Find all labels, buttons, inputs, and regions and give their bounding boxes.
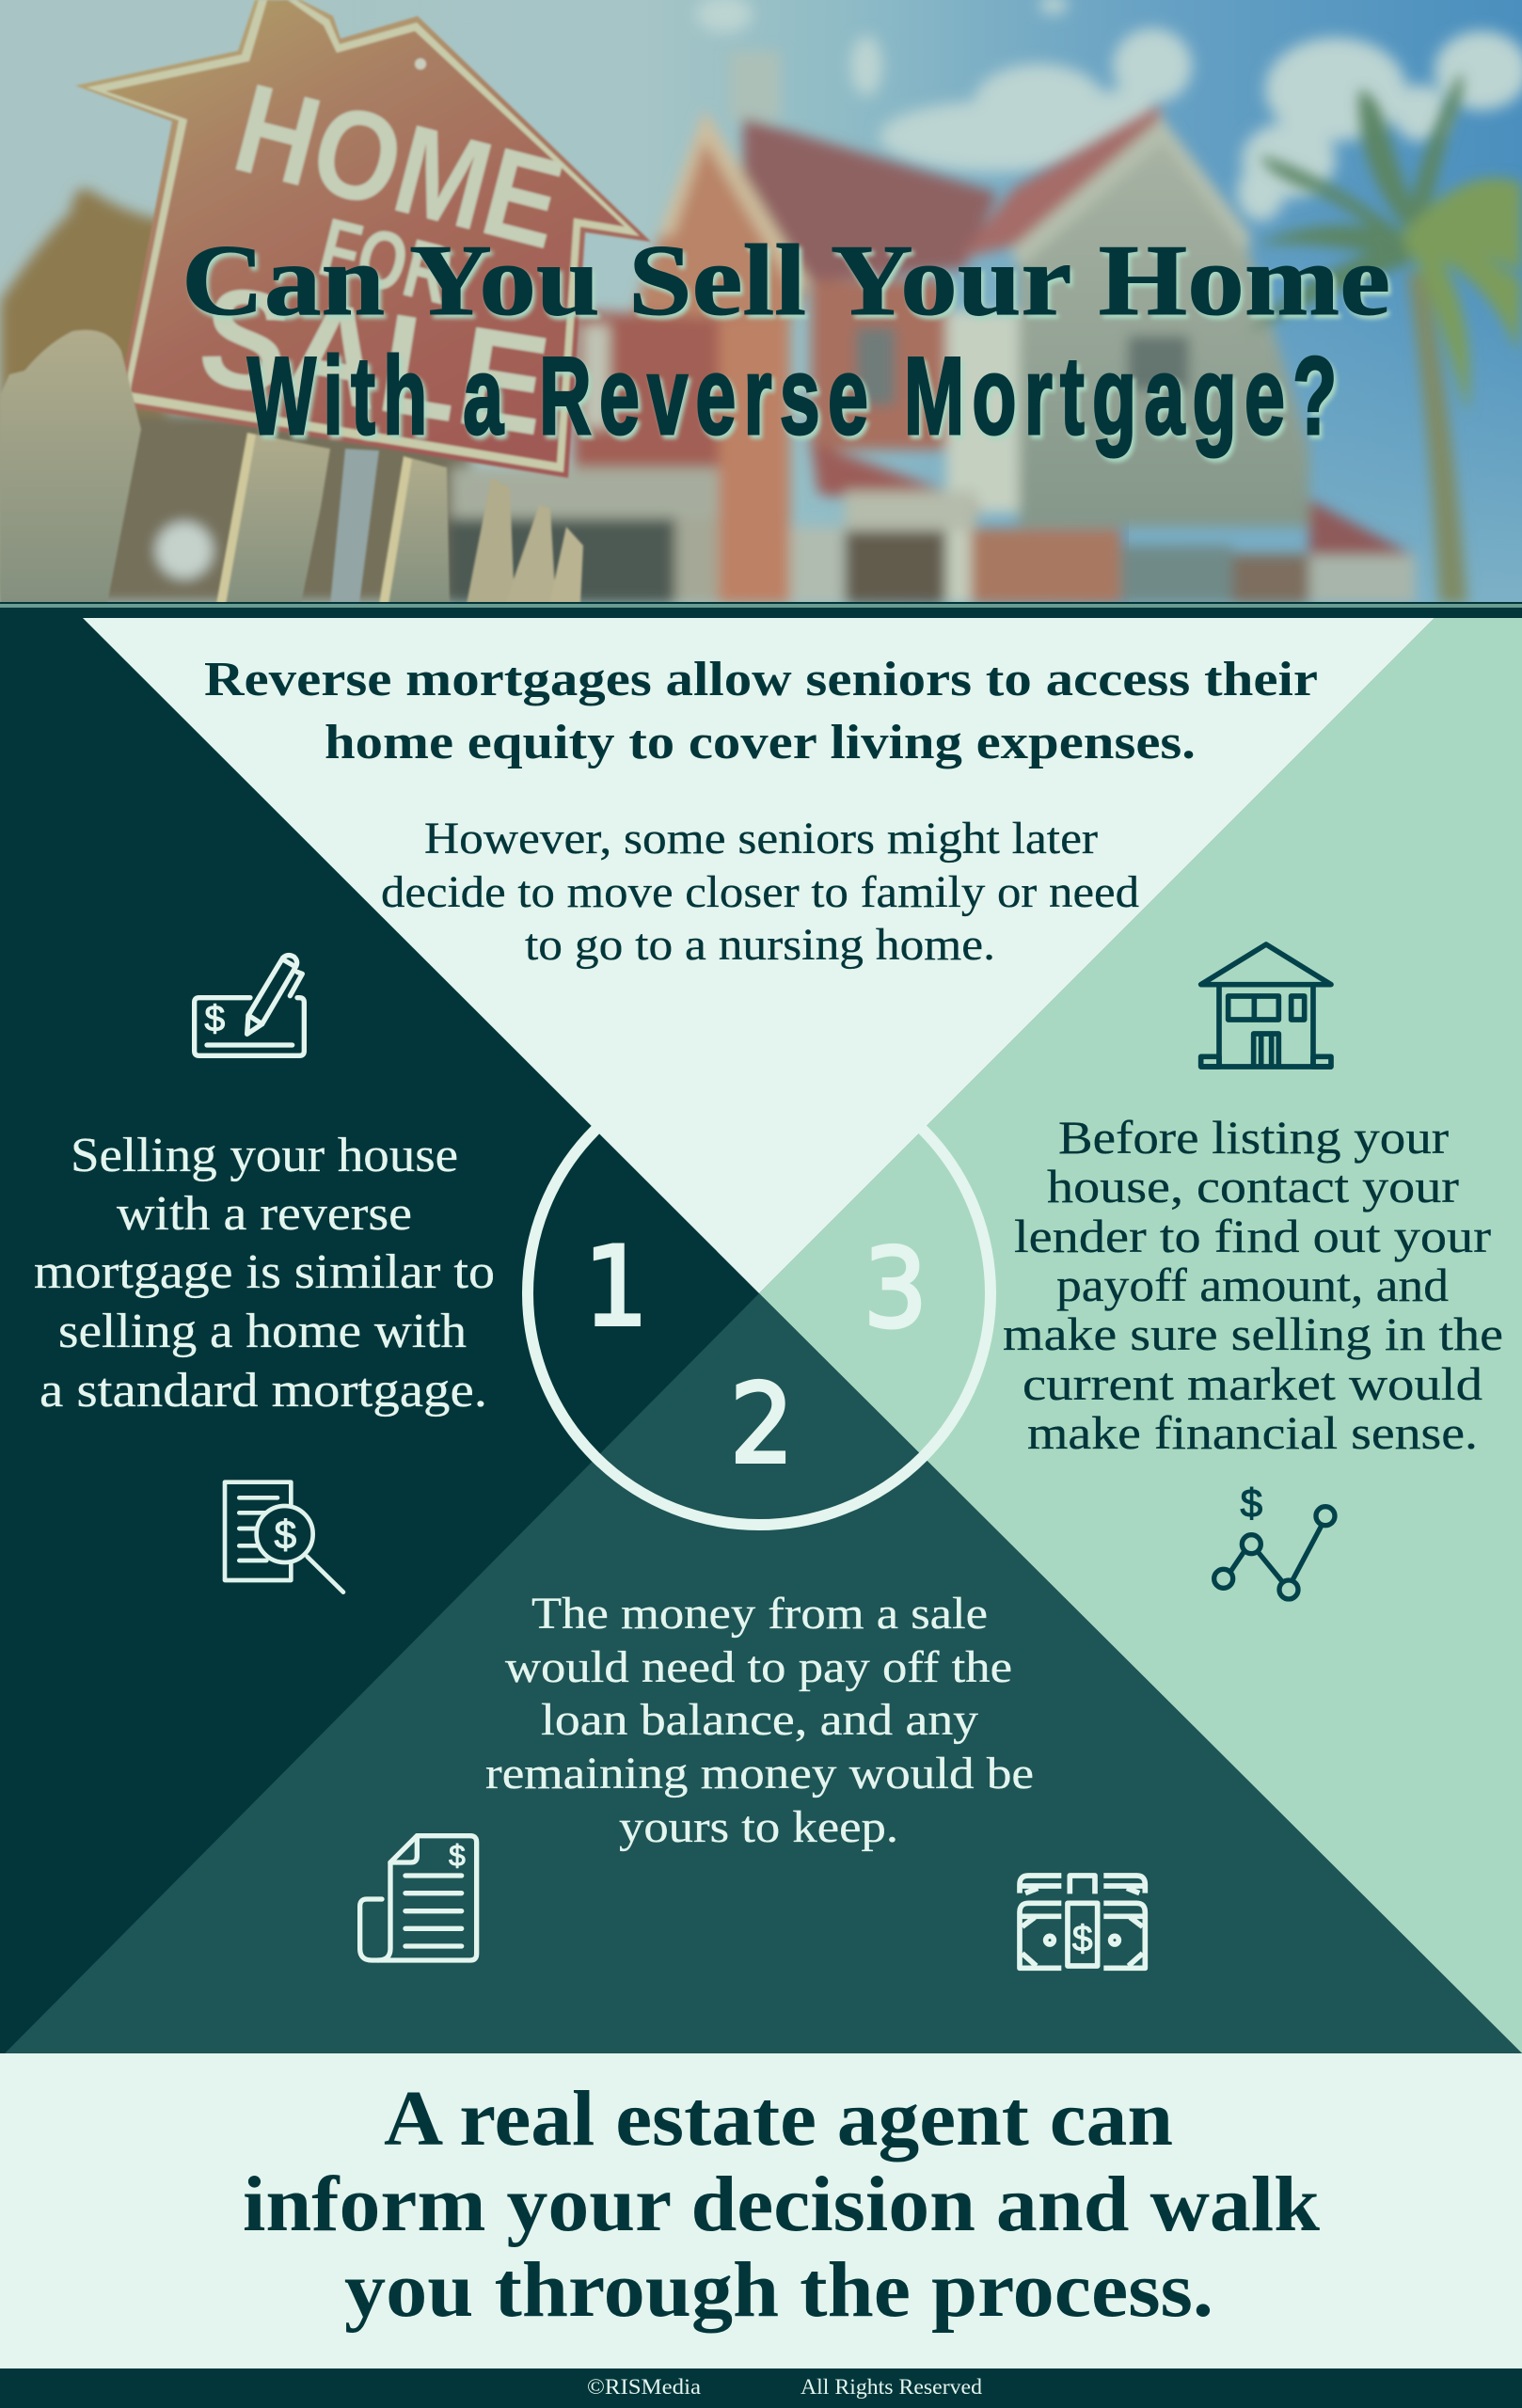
- header photo: home for sale sign and house: SALE: [190, 255, 559, 465]
- icon: document under magnifier: [225, 1482, 343, 1592]
- header photo: home for sale sign and house: HOME: [222, 56, 576, 276]
- step 3 text: make financial sense.: [1027, 1406, 1478, 1459]
- step 1 text: selling a home with: [58, 1305, 467, 1358]
- step 2 text: remaining money would be: [485, 1749, 1034, 1798]
- panel: left dark triangle: [0, 618, 759, 2053]
- icon: cash stack: $: [1072, 1918, 1093, 1959]
- step 3 text: [1003, 1111, 1503, 1459]
- intro body text: [381, 814, 1139, 970]
- step 2 text: [485, 1589, 1034, 1852]
- panel: closing message: inform your decision and walk: [243, 2161, 1320, 2248]
- icon: document under magnifier: $: [274, 1513, 296, 1558]
- intro body text: However, some seniors might later: [424, 814, 1098, 863]
- number 2: 2: [730, 1362, 794, 1488]
- panel: bottom teal triangle: [5, 1293, 1522, 2053]
- footer: [0, 2368, 1522, 2408]
- icon: bill receipt: $: [449, 1838, 466, 1872]
- step 3 text: Before listing your: [1058, 1111, 1449, 1164]
- footer: ©RISMedia: [587, 2375, 701, 2399]
- icon: cheque and pen: [195, 956, 304, 1055]
- panel: top light triangle: [83, 618, 1435, 1293]
- step 2 text: yours to keep.: [619, 1802, 898, 1852]
- intro bold text: home equity to cover living expenses.: [325, 716, 1196, 769]
- icon: cheque and pen: $: [204, 998, 225, 1039]
- step 1 text: Selling your house: [71, 1129, 458, 1182]
- step 3 text: current market would: [1023, 1357, 1482, 1410]
- ring around step numbers: [528, 1062, 991, 1525]
- step 1 text: [34, 1129, 495, 1418]
- step 1 text: with a reverse: [117, 1187, 412, 1241]
- panel: closing message: [0, 2053, 1522, 2368]
- heading: With a Reverse Mortgage?: [247, 335, 1337, 458]
- icon: price trend chart: $: [1240, 1481, 1262, 1527]
- step 3 text: make sure selling in the: [1003, 1307, 1503, 1360]
- intro body text: decide to move closer to family or need: [381, 867, 1139, 917]
- panel: closing message: A real estate agent can: [384, 2075, 1173, 2162]
- intro bold text: Reverse mortgages allow seniors to access their: [204, 653, 1318, 706]
- step 2 text: The money from a sale: [531, 1589, 988, 1639]
- intro body text: to go to a nursing home.: [525, 920, 995, 970]
- number 3: 3: [864, 1227, 927, 1353]
- header photo: home for sale sign and house: [0, 0, 1522, 604]
- icon: cash stack: [1020, 1876, 1145, 1968]
- step 3 text: lender to find out your: [1014, 1210, 1491, 1262]
- icon: price trend chart: [1214, 1481, 1335, 1599]
- step 3 text: house, contact your: [1047, 1160, 1459, 1212]
- icon: house: [1200, 944, 1332, 1067]
- step 2 text: loan balance, and any: [541, 1695, 978, 1745]
- panel: right mint triangle: [759, 618, 1522, 2053]
- step 2 text: would need to pay off the: [505, 1642, 1012, 1692]
- step 3 text: payoff amount, and: [1056, 1259, 1449, 1311]
- number 1: 1: [584, 1225, 648, 1351]
- intro bold text: [204, 653, 1318, 769]
- step 1 text: a standard mortgage.: [40, 1364, 487, 1418]
- header divider band: [0, 602, 1522, 618]
- heading: Can You Sell Your Home: [182, 225, 1390, 337]
- footer: All Rights Reserved: [801, 2375, 983, 2399]
- header photo: home for sale sign and house: FOR: [310, 199, 461, 322]
- panel: closing message: you through the process.: [344, 2246, 1213, 2334]
- icon: bill receipt: [360, 1836, 477, 1960]
- step 1 text: mortgage is similar to: [34, 1245, 495, 1299]
- heading: [182, 225, 1390, 458]
